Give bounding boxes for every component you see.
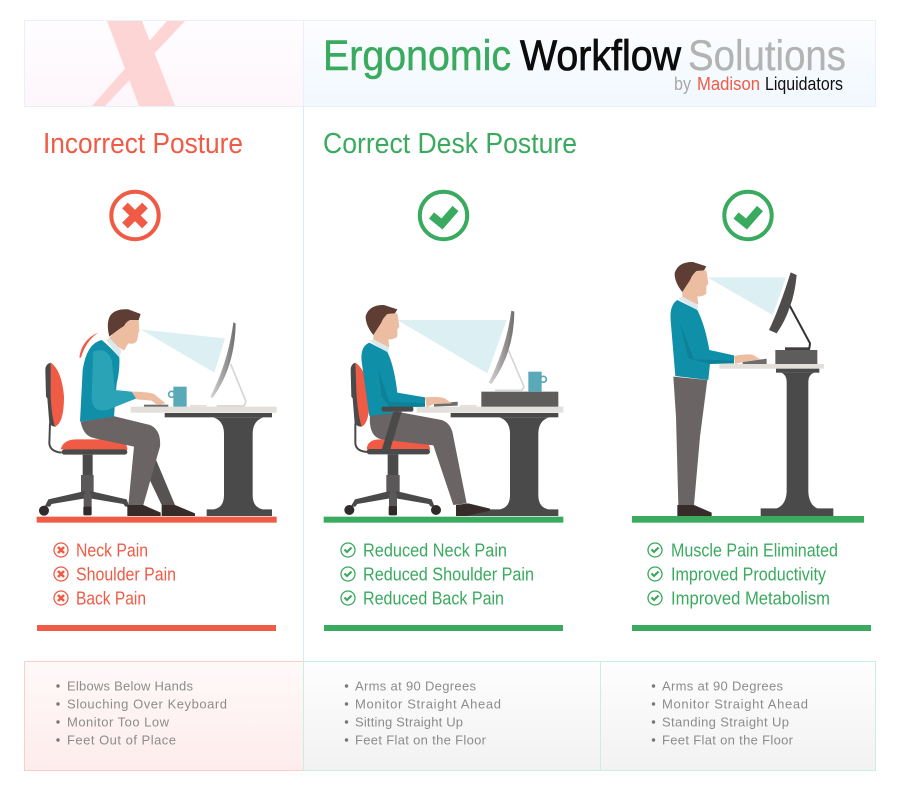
list: standing benefits: Improved Metabolism (671, 588, 830, 608)
illustration: correct standing posture (632, 262, 864, 523)
desk (417, 392, 563, 516)
mug (528, 372, 546, 392)
desk (131, 407, 277, 516)
byline: Liquidators (765, 74, 843, 94)
list: standing benefits: Improved Productivity (671, 564, 826, 584)
chair (344, 363, 441, 515)
mug (169, 387, 187, 407)
list: incorrect posture effects: Shoulder Pain (76, 564, 176, 584)
person (670, 262, 760, 516)
panel: incorrect posture checklist: Feet Out of Place (67, 733, 176, 748)
person (79, 309, 195, 516)
icon: green check in circle, standing (724, 192, 772, 239)
panel: correct sitting checklist: Feet Flat on the Floor (355, 733, 487, 748)
panel: standing checklist: Arms at 90 Degrees (662, 679, 784, 694)
panel: incorrect posture checklist: Monitor Too Low (67, 715, 170, 730)
list: incorrect posture effects (54, 540, 176, 608)
list: incorrect posture effects: Neck Pain (76, 540, 148, 560)
header banner (24, 20, 876, 106)
person (361, 305, 490, 516)
panel: incorrect posture checklist: Slouching Over Keyboard (67, 697, 227, 712)
list: correct sitting benefits (341, 540, 534, 608)
list: correct sitting benefits: Reduced Back Pain (363, 588, 504, 608)
title: Solutions (688, 32, 846, 80)
panel: incorrect posture checklist (24, 662, 304, 770)
icon: large faded X (92, 21, 185, 106)
standing desk (719, 347, 833, 516)
panel: incorrect posture checklist: Elbows Below Hands (67, 679, 194, 694)
monitor (141, 322, 246, 407)
list: correct sitting benefits: Reduced Shoulder Pain (363, 564, 534, 584)
panel: correct sitting checklist: Sitting Straight Up (355, 715, 463, 730)
byline: by (674, 74, 691, 94)
icons: small red crosses (54, 543, 68, 605)
title: Ergonomic (323, 32, 511, 80)
panel: standing checklist: Standing Straight Up (662, 715, 789, 730)
panel: correct sitting checklist (304, 662, 600, 770)
list: standing benefits: Muscle Pain Eliminated (671, 540, 838, 560)
icon: red cross in circle (111, 192, 159, 239)
panel: standing checklist (600, 662, 876, 770)
monitor (397, 311, 524, 407)
panel: correct sitting checklist: Monitor Straight Ahead (355, 697, 501, 712)
title: Workflow (520, 32, 682, 80)
chair (39, 363, 129, 516)
icons: small green checks (341, 543, 355, 605)
heading: correct desk posture: Correct Desk Posture (323, 128, 577, 160)
icon: green check in circle, sitting (420, 192, 467, 239)
panel: standing checklist: Feet Flat on the Floor (662, 733, 794, 748)
illustration: correct seated posture (324, 305, 563, 523)
byline: Madison (697, 74, 760, 94)
list: standing benefits (648, 540, 838, 608)
monitor (707, 272, 810, 364)
panel: correct sitting checklist: Arms at 90 Degrees (355, 679, 476, 694)
icons: small green checks (648, 543, 662, 605)
list: incorrect posture effects: Back Pain (76, 588, 146, 608)
illustration: incorrect seated posture (37, 309, 277, 523)
heading: incorrect posture: Incorrect Posture (43, 128, 243, 160)
panel: standing checklist: Monitor Straight Ahead (662, 697, 808, 712)
list: correct sitting benefits: Reduced Neck Pain (363, 540, 507, 560)
